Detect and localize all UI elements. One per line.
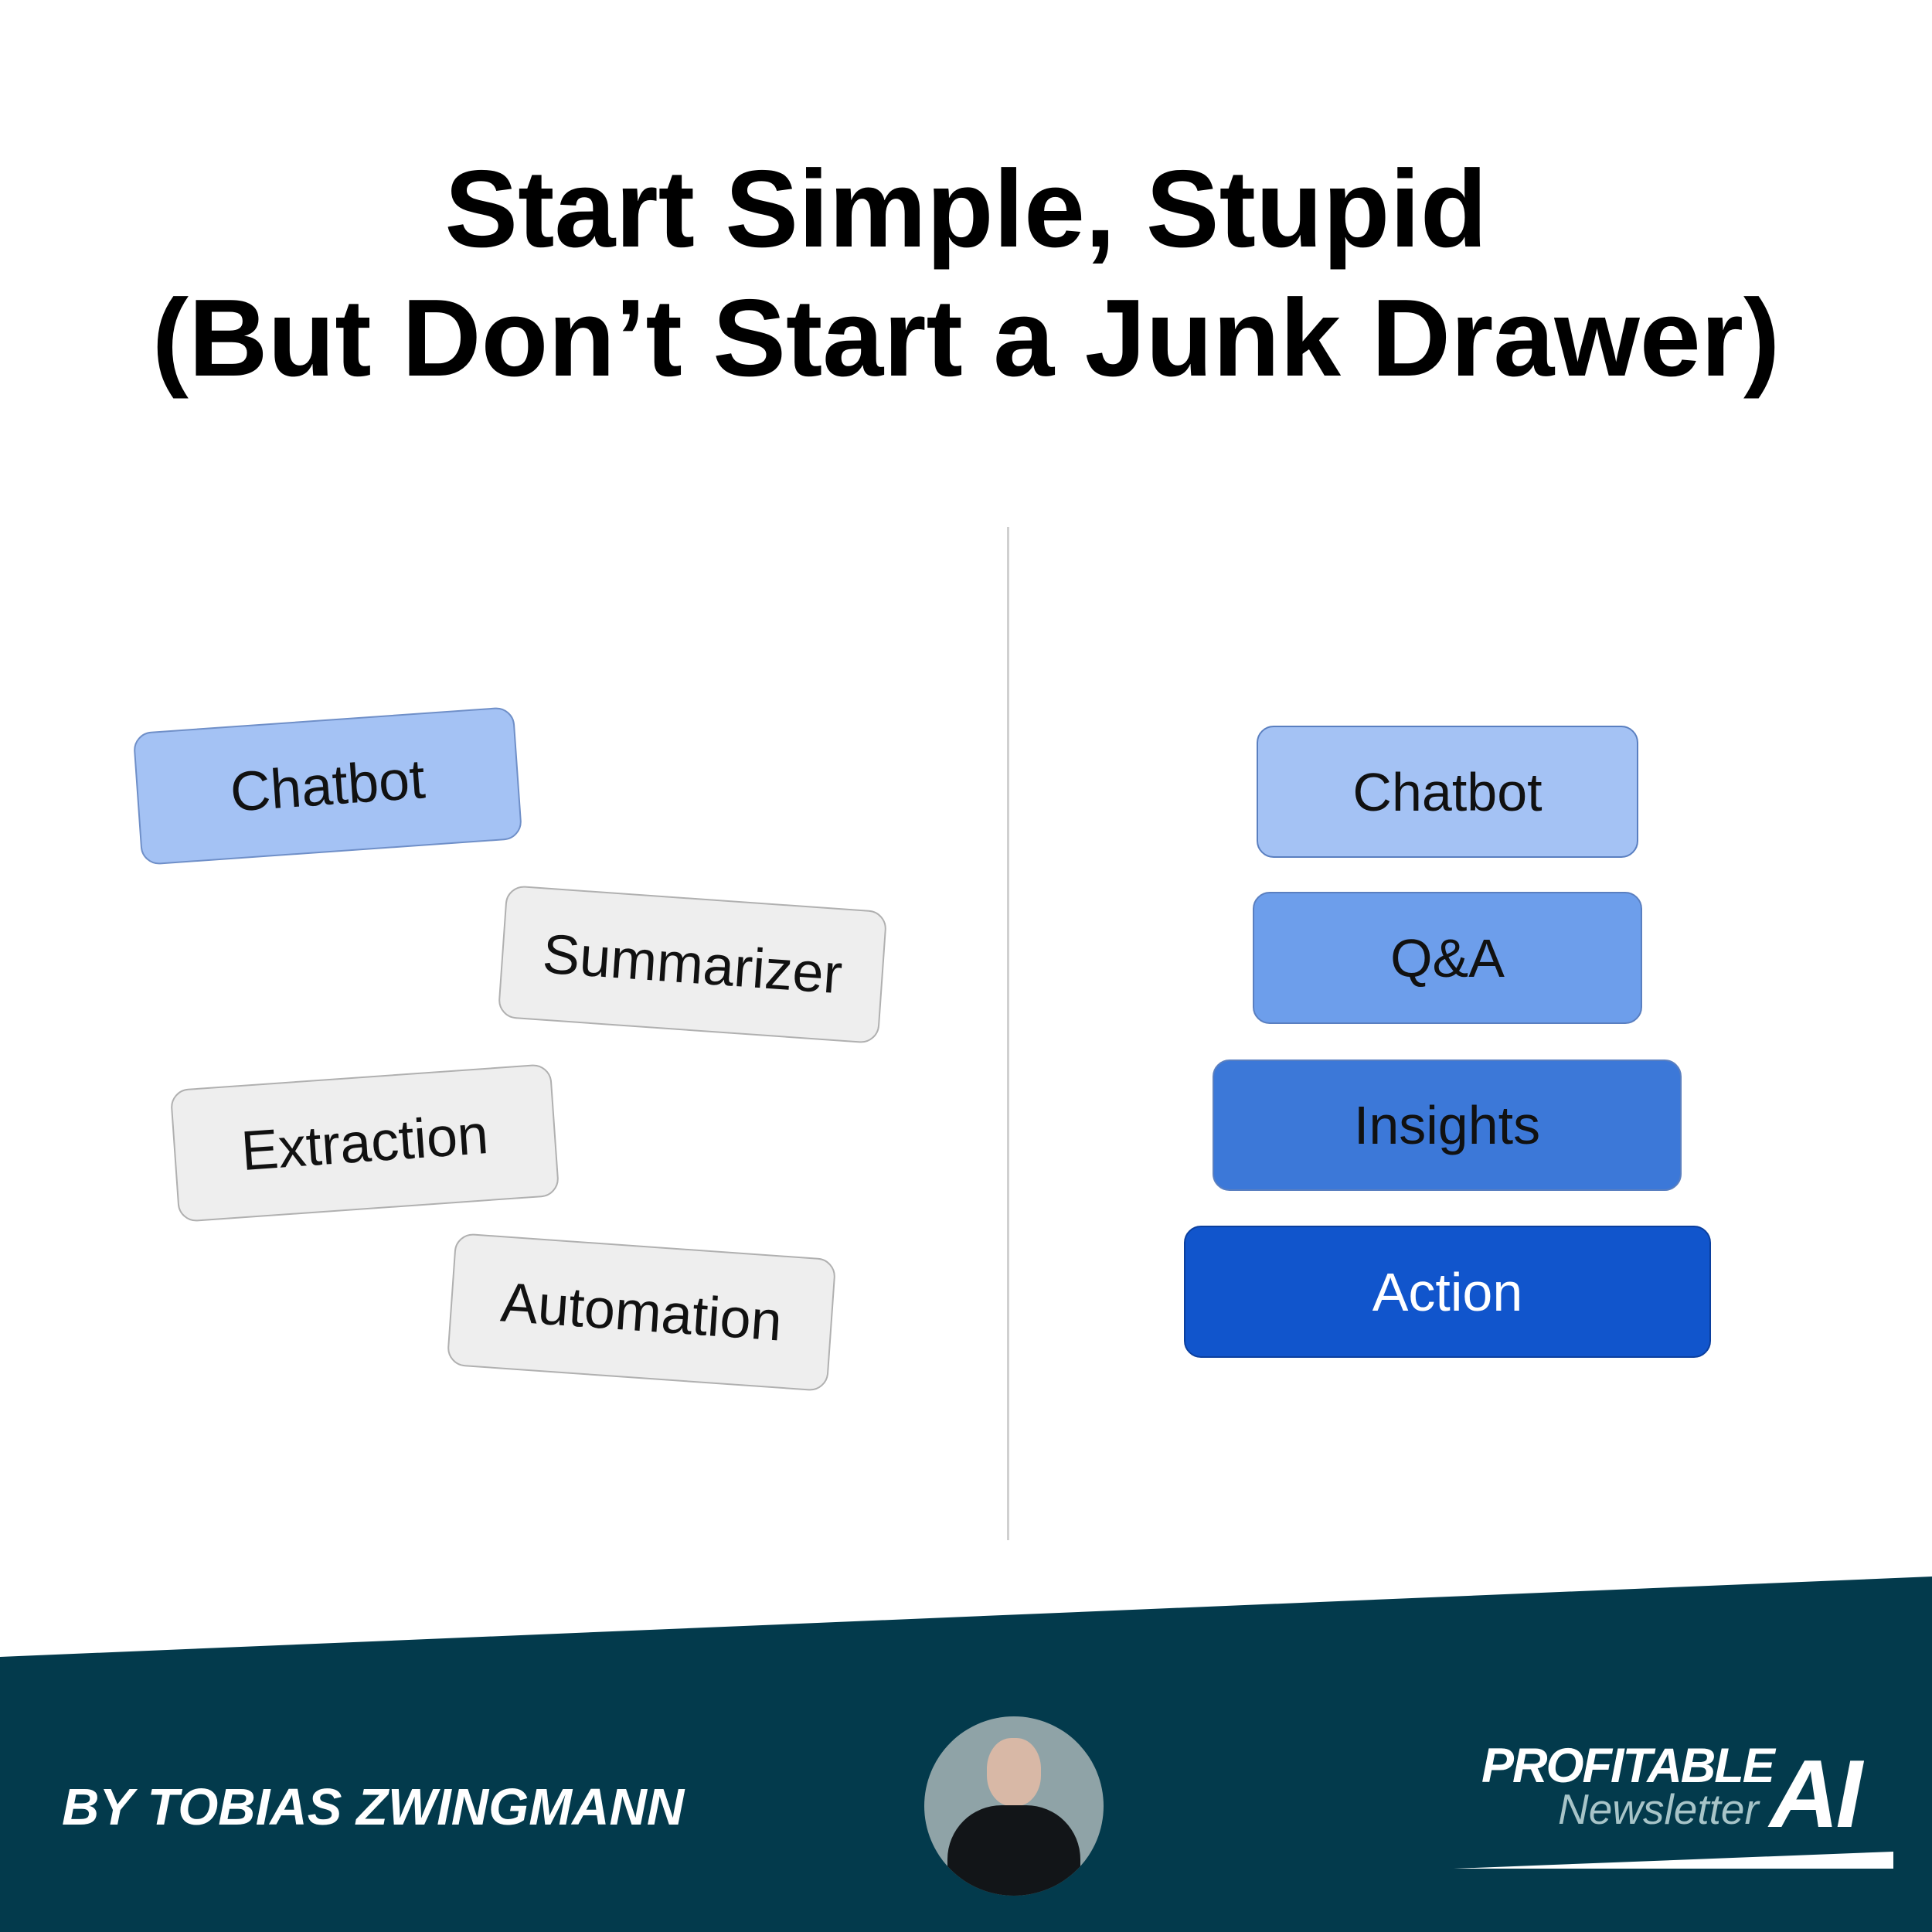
panel: stack <box>1184 726 1711 1358</box>
card: Summarizer <box>498 885 887 1044</box>
card: Chatbot <box>133 706 522 866</box>
divider <box>1007 527 1009 1540</box>
title: (But Don’t Start a Junk Drawer) <box>152 277 1780 400</box>
layer: Action: Action <box>1372 1261 1522 1321</box>
logo: Newsletter <box>1558 1785 1759 1833</box>
card: Automation <box>447 1233 836 1392</box>
title <box>152 148 1780 400</box>
layer: Chatbot <box>1257 726 1638 858</box>
card: Automation: Automation <box>499 1271 784 1353</box>
card: Summarizer: Summarizer <box>541 923 844 1005</box>
layer: Chatbot: Chatbot <box>1352 762 1543 822</box>
card: Extraction: Extraction <box>240 1104 490 1182</box>
card: Chatbot: Chatbot <box>228 748 427 824</box>
byline: BY TOBIAS ZWINGMANN <box>62 1778 684 1836</box>
footer <box>0 1577 1932 1932</box>
panel: junk drawer <box>134 708 886 1391</box>
logo: PROFITABLE <box>1481 1739 1774 1793</box>
layer: Insights: Insights <box>1354 1095 1540 1155</box>
layer: Q&A: Q&A <box>1390 927 1505 988</box>
photo <box>924 1716 1104 1896</box>
layer: Insights <box>1213 1060 1682 1191</box>
layer: Action <box>1184 1226 1711 1358</box>
layer: Q&A <box>1253 892 1642 1024</box>
card: Extraction <box>170 1063 560 1223</box>
title: Start Simple, Stupid <box>444 148 1488 270</box>
logo: AI <box>1770 1741 1859 1848</box>
logo <box>1454 1739 1893 1869</box>
